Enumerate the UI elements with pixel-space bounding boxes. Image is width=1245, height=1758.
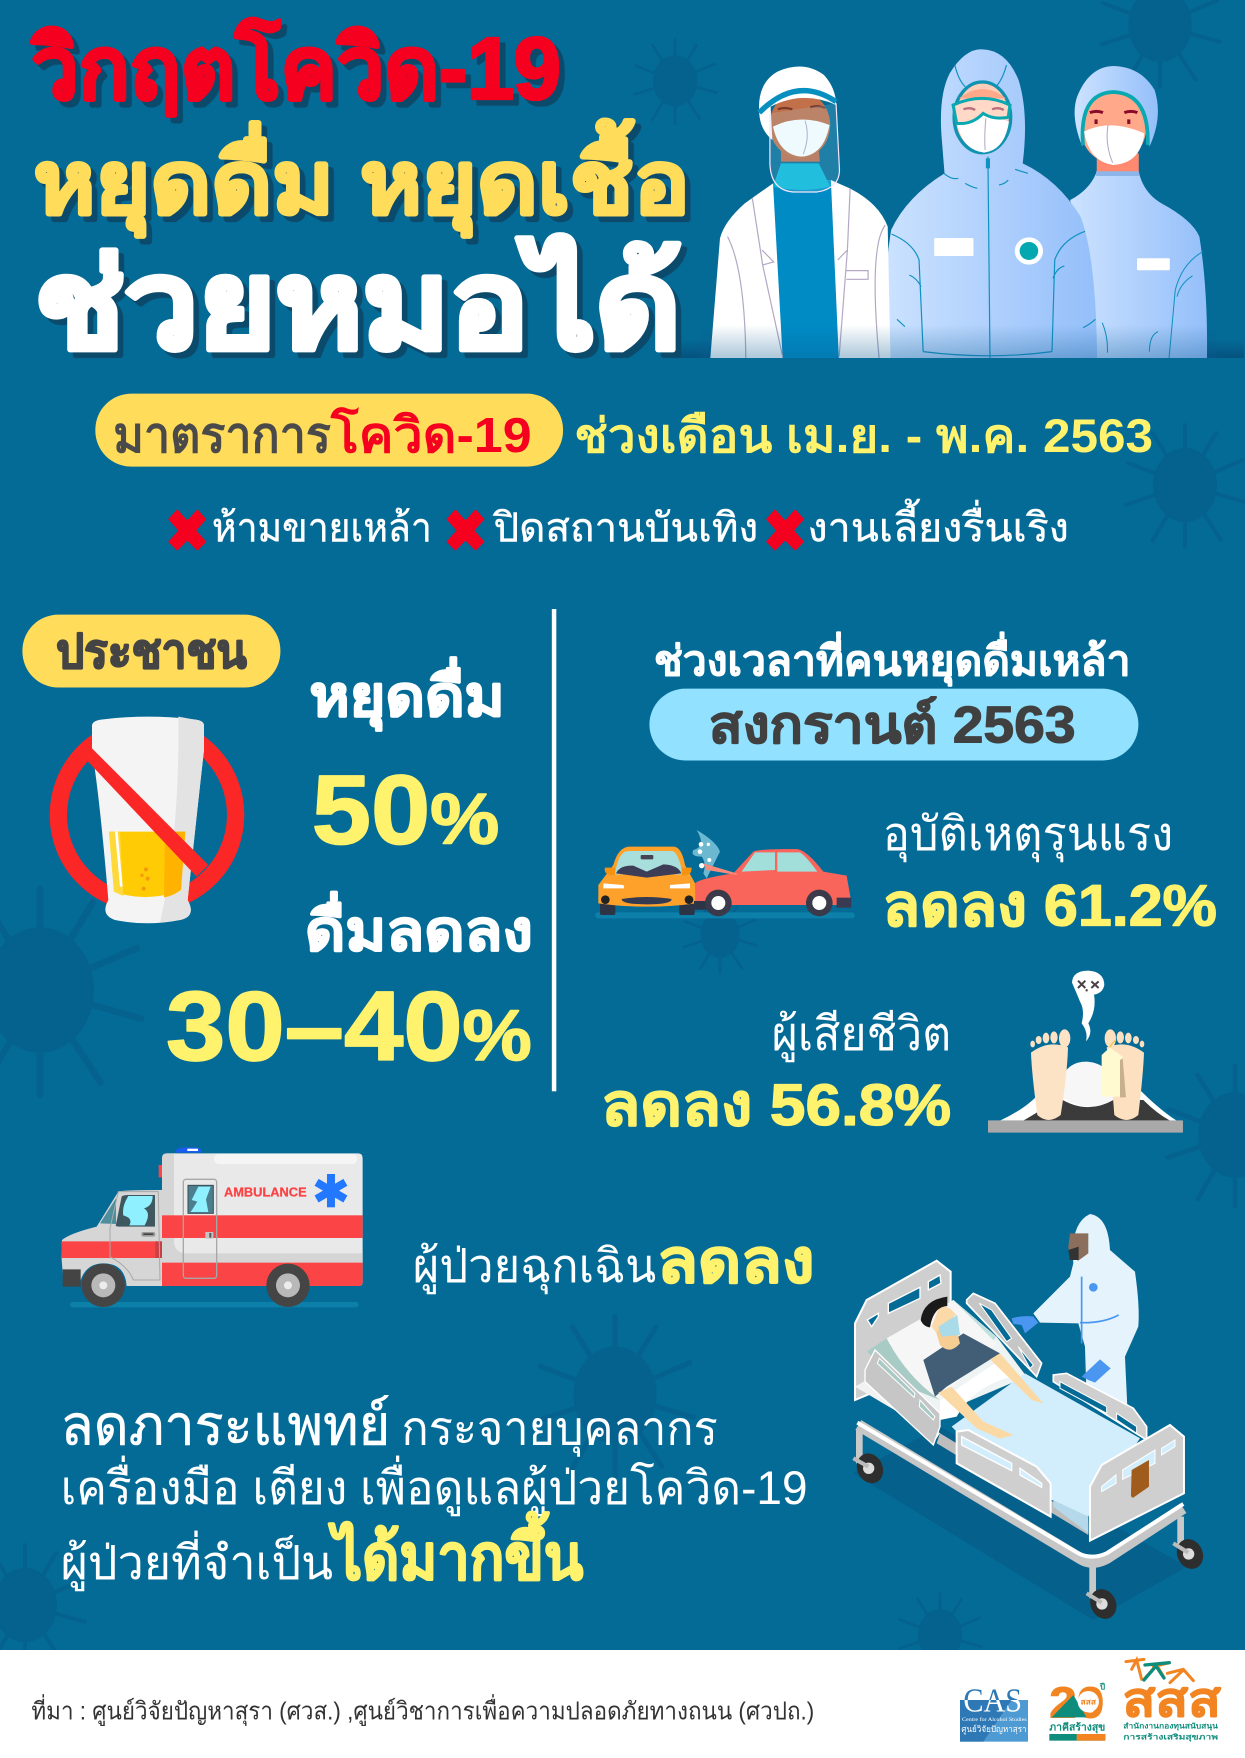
stat: drank less: ดื่มลดลง <box>305 891 533 962</box>
stat: stopped drinking: หยุดดื่ม <box>310 657 505 732</box>
illustration: glass of beer with prohibition sign <box>58 717 236 923</box>
paragraph: reduced medical burden: ลดภาระแพทย์ <box>61 1394 390 1457</box>
illustration: car crash <box>595 830 855 918</box>
illustration: ambulance: AMBULANCE <box>224 1185 307 1200</box>
footer band <box>0 1650 1245 1758</box>
stat: deaths: ลดลง 56.8% <box>601 1073 951 1138</box>
illustration: medical staff <box>679 49 1244 358</box>
divider <box>552 609 556 1091</box>
logo: ThaiHealth: การสร้างเสริมสุขภาพ <box>1123 1732 1218 1741</box>
logo: ThaiHealth: สสส <box>1123 1674 1222 1726</box>
pill: public <box>22 615 280 688</box>
pill: measures: โควิด-19 <box>330 406 532 463</box>
logo: CAS <box>960 1683 1028 1742</box>
measure 3: งานเลี้ยงรื่นเริง <box>808 499 1069 551</box>
stat: stopped drinking: 50% <box>312 754 499 864</box>
logo: CAS: ศูนย์วิจัยปัญหาสุรา <box>961 1724 1027 1735</box>
stat: deaths <box>601 1007 951 1138</box>
title line 2: หยุดดื่ม หยุดเชื้อ <box>34 118 690 238</box>
pill: measures <box>95 394 563 467</box>
stat: deaths: ผู้เสียชีวิต <box>772 1007 951 1063</box>
paragraph: reduced medical burden: เครื่องมือ เตียง เพื่อดูแลผู้ป่วยโควิด-19 <box>61 1455 808 1517</box>
stat: drank less: 30–40 % <box>166 971 532 1081</box>
stat: accidents: อุบัติเหตุรุนแรง <box>883 807 1173 863</box>
source: ที่มา : ศูนย์วิจัยปัญหาสุรา (ศวส.) ,ศูนย์วิชาการเพื่อความปลอดภัยทางถนน (ศวปถ.) <box>31 1693 814 1726</box>
logo: 20 years: ปี <box>1099 1681 1105 1691</box>
stat: accidents: ลดลง 61.2% <box>883 873 1217 938</box>
pill: measures: มาตราการ <box>113 408 331 463</box>
illustration: ambulance <box>61 1147 363 1307</box>
measure 1: ห้ามขายเหล้า <box>212 505 432 551</box>
title line 3: ช่วยหมอได้ <box>35 235 681 375</box>
logo: ThaiHealth: สำนักงานกองทุนสนับสนุน <box>1123 1722 1218 1731</box>
logo: CAS: CAS <box>963 1683 1022 1720</box>
illustration: patient in hospital bed with nurse <box>852 1214 1208 1623</box>
paragraph: reduced medical burden: กระจายบุคลากร <box>402 1402 718 1458</box>
logo: ThaiHealth <box>1123 1659 1222 1741</box>
period text: ช่วงเดือน เม.ย. - พ.ค. 2563 <box>574 409 1153 462</box>
paragraph: reduced medical burden <box>61 1394 808 1593</box>
emergency patients <box>413 1227 814 1295</box>
emergency patients: ลดลง <box>657 1227 814 1295</box>
logo: 20 years <box>1049 1678 1105 1741</box>
illustration: body with toe tag and ghost <box>988 971 1183 1133</box>
pill: Songkran: สงกรานต์ 2563 <box>709 695 1076 753</box>
emergency patients: ผู้ป่วยฉุกเฉิน <box>413 1239 656 1295</box>
title line 1: วิกฤตโควิด-19 <box>30 18 561 118</box>
logo: CAS: Centre for Alcohol Studies <box>962 1718 1027 1723</box>
stat: stopped drinking <box>310 657 505 864</box>
logo: 20 years: สสส <box>1081 1698 1096 1707</box>
logo: 20 years: 20 <box>1049 1678 1104 1727</box>
stat: accidents <box>883 807 1217 938</box>
logos <box>960 1659 1222 1742</box>
stat: drank less <box>166 891 533 1081</box>
logo: 20 years: ภาคีสร้างสุข <box>1049 1722 1105 1734</box>
pill: public: ประชาชน <box>56 624 247 677</box>
lower bed frame <box>858 1425 1183 1562</box>
paragraph: reduced medical burden: ได้มากขึ้น <box>328 1511 583 1593</box>
side rails <box>967 1293 1042 1377</box>
heading: stopped drinking period: ช่วงเวลาที่คนหยุดดื่มเหล้า <box>654 631 1131 687</box>
measure 2: ปิดสถานบันเทิง <box>492 505 758 551</box>
nurse <box>1012 1214 1139 1407</box>
pill: Songkran <box>649 689 1138 760</box>
paragraph: reduced medical burden: ผู้ป่วยที่จำเป็น <box>61 1530 333 1592</box>
